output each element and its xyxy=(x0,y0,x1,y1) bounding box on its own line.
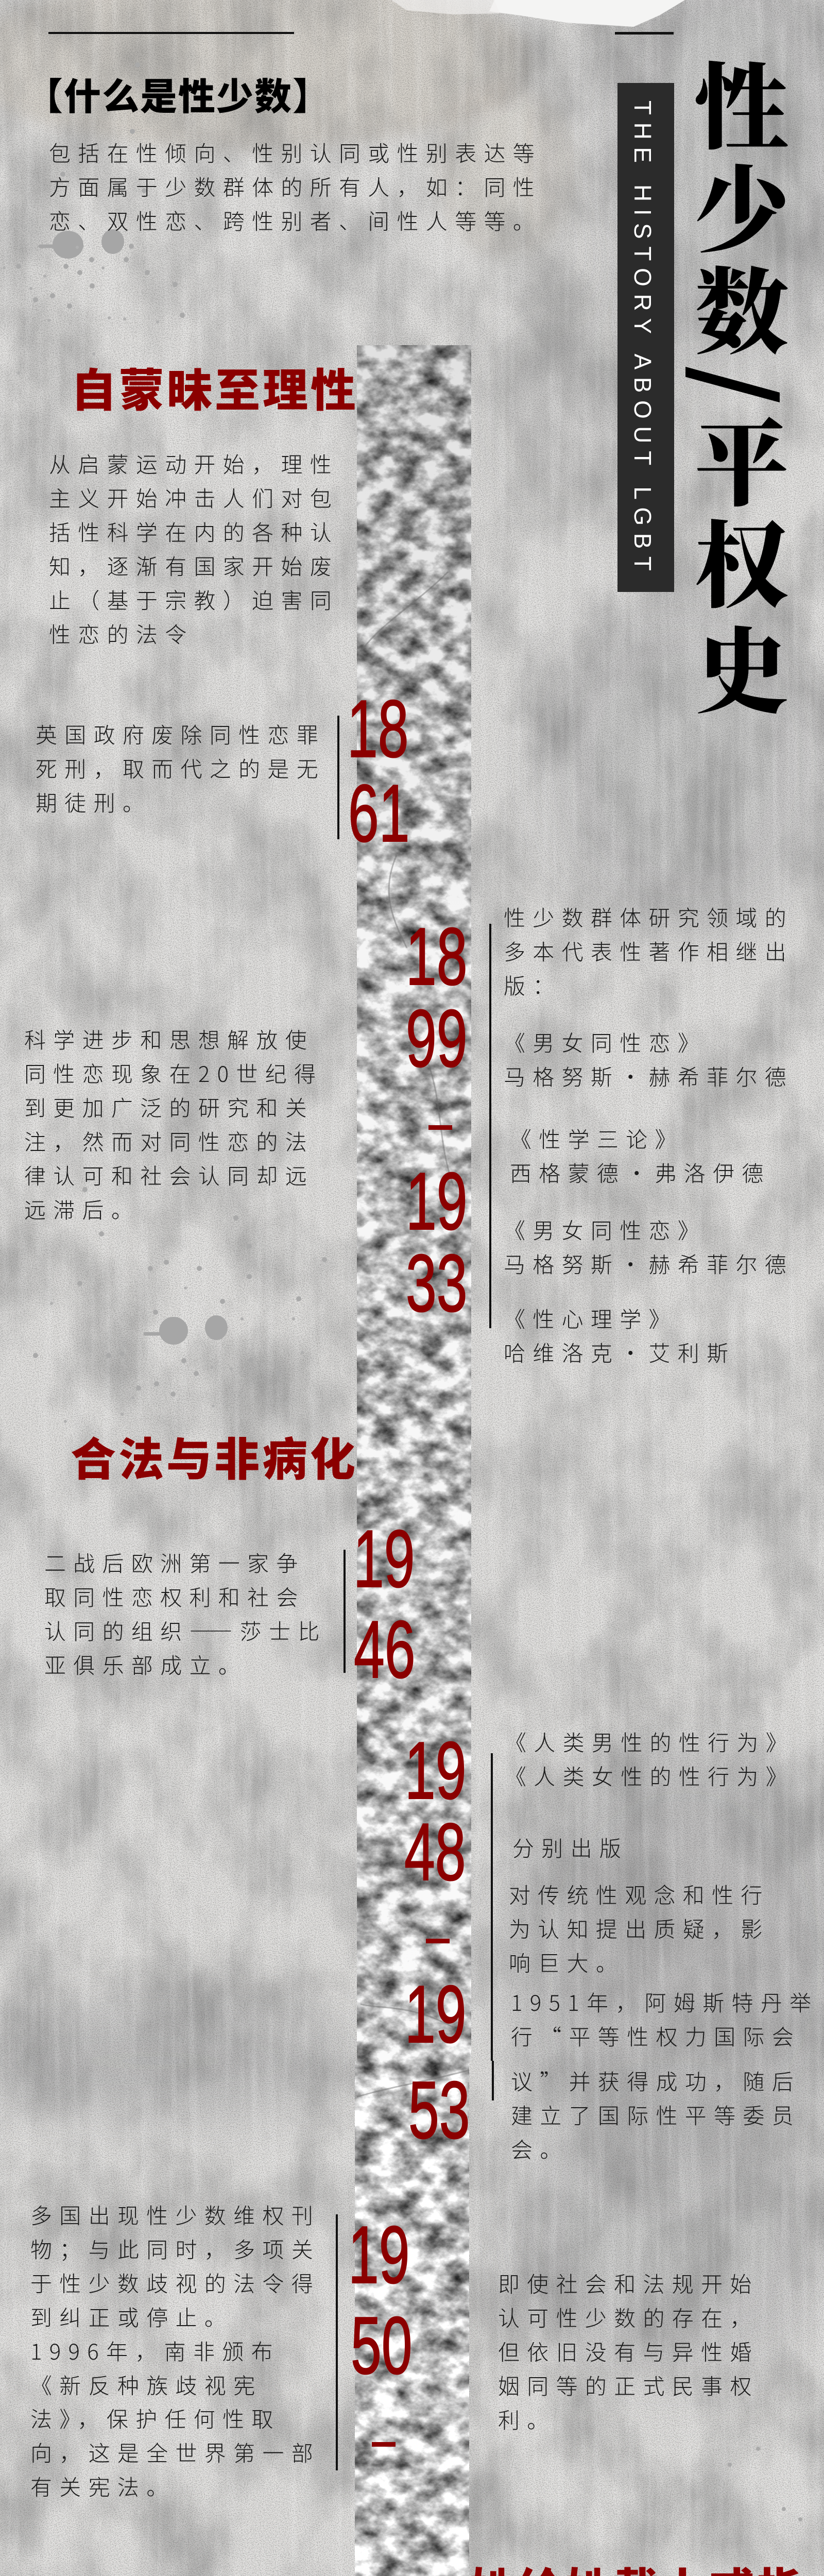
text: science and liberation: 到更加广泛的研究和关 xyxy=(24,1091,314,1123)
text: book 1: 马格努斯·赫希菲尔德 xyxy=(504,1060,794,1092)
text: despite recognition: 姻同等的正式民事权 xyxy=(498,2369,759,2401)
timeline entry: 1946 xyxy=(0,1504,427,1685)
text: book 3: 《男女同性恋》 xyxy=(504,1214,707,1245)
top rule: right xyxy=(615,32,674,35)
timeline entry: 1948-1953 xyxy=(402,1721,824,2174)
text: science and liberation: 同性恋现象在20世纪得 xyxy=(24,1057,323,1089)
text: 多国出现性少数维权刊 xyxy=(30,2199,320,2230)
top rule: left xyxy=(48,32,294,34)
rule xyxy=(344,1550,345,1673)
ink splatter: upper left xyxy=(3,62,185,375)
text: intro: 多本代表性著作相继出 xyxy=(504,935,794,967)
main title: vertical: 性 xyxy=(695,33,788,168)
text: 1951: 1951年，阿姆斯特丹举 xyxy=(511,1986,818,2018)
rule xyxy=(489,924,491,1328)
text: Kinsey reports xyxy=(505,1725,795,1793)
text: Kinsey reports: 《人类男性的性行为》 xyxy=(505,1726,795,1757)
text: 1996年，南非颁布 xyxy=(30,2335,280,2366)
year xyxy=(402,1726,479,2143)
text: 死刑，取而代之的是无 xyxy=(36,752,325,784)
timeline entry: 1861 xyxy=(0,685,417,845)
year: 19 xyxy=(406,1156,468,1247)
text xyxy=(44,1546,327,1682)
text: book 2 xyxy=(510,1122,771,1190)
text: definition xyxy=(49,135,542,238)
year xyxy=(402,912,479,1319)
text: enlightenment: 知，逐渐有国家开始废 xyxy=(49,550,339,581)
heading: from ignorance to reason: 自蒙昧至理性 xyxy=(71,354,358,420)
text: book 2: 西格蒙德·弗洛伊德 xyxy=(510,1157,771,1188)
text: enlightenment: 括性科学在内的各种认 xyxy=(49,516,339,547)
text: despite recognition: 认可性少数的存在， xyxy=(498,2301,759,2333)
text: 到纠正或停止。 xyxy=(30,2301,233,2332)
rule xyxy=(336,2214,338,2470)
text: 1951 continued xyxy=(511,2064,801,2166)
text: 于性少数歧视的法令得 xyxy=(30,2267,320,2298)
text: book 3: 马格努斯·赫希菲尔德 xyxy=(504,1248,794,1279)
text: intro: 性少数群体研究领域的 xyxy=(504,901,794,933)
text: science and liberation: 科学进步和思想解放使 xyxy=(24,1023,314,1055)
text xyxy=(36,717,325,819)
year: 18 xyxy=(347,684,409,774)
text: 有关宪法。 xyxy=(30,2470,176,2502)
year: 46 xyxy=(354,1604,416,1695)
text: enlightenment xyxy=(49,447,339,650)
text: Kinsey reports: 《人类女性的性行为》 xyxy=(505,1760,795,1791)
main title: vertical: 史 xyxy=(695,598,788,732)
text: enlightenment: 从启蒙运动开始，理性 xyxy=(49,448,339,479)
year: 50 xyxy=(351,2300,413,2391)
text: impact xyxy=(509,1877,770,1979)
timeline column: textured stone strip xyxy=(355,345,471,2576)
title banner: dark vertical strip xyxy=(617,83,674,592)
year: 19 xyxy=(348,2210,410,2300)
ink splatter: middle left xyxy=(33,1187,327,1423)
text: enlightenment: 主义开始冲击人们对包 xyxy=(49,482,339,513)
ink splatter: lower right xyxy=(728,2447,802,2521)
text: book 2: 《性学三论》 xyxy=(510,1123,684,1154)
text: 认同的组织——莎士比 xyxy=(44,1615,327,1646)
text: science and liberation xyxy=(24,1022,323,1226)
text: enlightenment: 止（基于宗教）迫害同 xyxy=(49,584,339,615)
year: 53 xyxy=(408,2065,470,2156)
year: 33 xyxy=(406,1238,468,1329)
text: 《新反种族歧视宪 xyxy=(30,2369,262,2400)
text: enlightenment: 性恋的法令 xyxy=(49,618,194,649)
text: 1951 continued: 议”并获得成功，随后 xyxy=(511,2065,801,2096)
year xyxy=(346,685,413,845)
heading: legalisation and depathologisation: 合法与非病化 xyxy=(71,1423,358,1489)
text: 亚俱乐部成立。 xyxy=(44,1649,247,1680)
text: 1951 continued: 建立了国际性平等委员 xyxy=(511,2099,801,2130)
text: intro: 版： xyxy=(504,969,562,1001)
year: 19 xyxy=(353,1514,415,1604)
timeline entry: 1950 xyxy=(0,2195,427,2509)
text: 二战后欧洲第一家争 xyxy=(44,1547,305,1578)
year: 18 xyxy=(406,911,468,1002)
year: 19 xyxy=(405,1969,467,2060)
text: definition: 包括在性倾向、性别认同或性别表达等 xyxy=(49,137,542,168)
year: 19 xyxy=(405,1725,467,1816)
year xyxy=(345,2210,422,2452)
main title: vertical: 权 xyxy=(695,492,788,626)
text: despite recognition: 即使社会和法规开始 xyxy=(498,2267,759,2299)
text: definition: 恋、双性恋、跨性别者、间性人等等。 xyxy=(49,205,542,236)
text: 物；与此同时，多项关 xyxy=(30,2233,320,2264)
text: science and liberation: 注，然而对同性恋的法 xyxy=(24,1125,314,1157)
main title: vertical xyxy=(680,52,798,721)
text: book 1: 《男女同性恋》 xyxy=(504,1026,707,1058)
text: book 4: 《性心理学》 xyxy=(504,1302,678,1334)
rule xyxy=(492,2061,493,2100)
year: 48 xyxy=(404,1807,466,1897)
text xyxy=(30,2198,320,2503)
text: book 4: 哈维洛克·艾利斯 xyxy=(504,1336,735,1368)
text: 期徒刑。 xyxy=(36,786,151,818)
text: 1951 xyxy=(511,1985,818,2053)
text: despite recognition xyxy=(498,2266,759,2436)
main title: vertical: 少 xyxy=(695,137,788,271)
text: 法》，保护任何性取 xyxy=(30,2402,281,2434)
text: book 4 xyxy=(504,1301,735,1369)
text: science and liberation: 律认可和社会认同却远 xyxy=(24,1159,314,1191)
main title: vertical: / xyxy=(659,367,802,402)
text: 取同性恋权利和社会 xyxy=(44,1581,305,1612)
rule xyxy=(337,716,339,839)
english subtitle: THE HISTORY ABOUT LGBT xyxy=(629,100,656,571)
text: book 1 xyxy=(504,1025,794,1093)
text: impact: 为认知提出质疑，影 xyxy=(509,1912,770,1944)
timeline entry: 1899-1933 xyxy=(402,896,824,1370)
text: impact: 响巨大。 xyxy=(509,1946,625,1978)
text: 1951: 行“平等性权力国际会 xyxy=(511,2020,801,2052)
text: science and liberation: 远滞后。 xyxy=(24,1193,140,1225)
year: 99 xyxy=(406,993,468,1084)
main title: vertical: 平 xyxy=(695,391,788,525)
text: intro xyxy=(504,900,794,1002)
text: definition: 方面属于少数群体的所有人，如：同性 xyxy=(49,171,542,202)
text: 1951 continued: 会。 xyxy=(511,2133,569,2164)
text: impact: 对传统性观念和性行 xyxy=(509,1878,770,1910)
text: despite recognition: 利。 xyxy=(498,2403,556,2435)
main title: vertical: 数 xyxy=(695,239,788,373)
text: 向，这是全世界第一部 xyxy=(30,2436,320,2468)
text: published: 分别出版 xyxy=(512,1832,628,1863)
text: despite recognition: 但依旧没有与异性婚 xyxy=(498,2335,759,2367)
rule xyxy=(491,1753,492,2061)
text: 英国政府废除同性恋罪 xyxy=(36,718,325,750)
text: book 3 xyxy=(504,1213,794,1281)
heading: what is LGBT: 【什么是性少数】 xyxy=(26,66,331,121)
year: 61 xyxy=(348,768,410,859)
